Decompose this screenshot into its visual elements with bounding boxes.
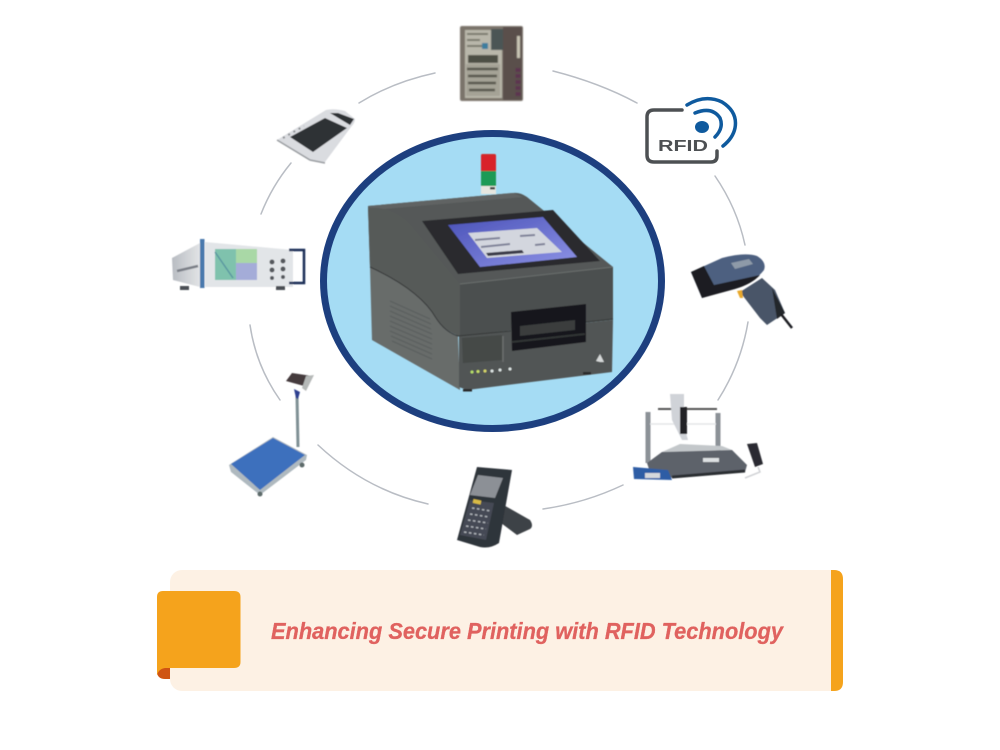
icon: dispensing robot bbox=[633, 394, 763, 480]
lower side bbox=[370, 267, 460, 390]
lower panel details bbox=[462, 335, 502, 363]
banner right accent bbox=[831, 570, 843, 691]
fold tab bbox=[157, 660, 170, 679]
touch screen bezel bbox=[422, 210, 600, 274]
banner title: Enhancing Secure Printing with RFID Technology bbox=[271, 618, 784, 644]
signal tower light bbox=[481, 154, 496, 194]
icon: platform scale bbox=[229, 373, 314, 496]
upper side and top bbox=[368, 193, 613, 336]
paper slot bbox=[511, 304, 586, 351]
icon: barcode scanner bbox=[691, 254, 792, 328]
status LEDs bbox=[470, 368, 512, 374]
touch screen bbox=[448, 217, 577, 267]
logo mark bbox=[596, 354, 604, 362]
vent grille bbox=[390, 301, 432, 359]
connecting ring arcs bbox=[250, 71, 748, 509]
central printer bbox=[368, 154, 613, 392]
orange square bbox=[157, 591, 240, 676]
icon: control cabinet bbox=[460, 26, 523, 101]
icon: RFID: RFID bbox=[658, 138, 708, 155]
lower front face bbox=[459, 320, 613, 390]
icon: spectrum analyzer bbox=[172, 239, 304, 290]
icon: handheld RFID reader bbox=[457, 467, 532, 548]
banner panel bbox=[170, 570, 842, 691]
icon: RFID bbox=[647, 99, 735, 162]
upper front face bbox=[460, 267, 613, 336]
printer body bbox=[368, 193, 613, 392]
icon: keypad tablet device bbox=[277, 109, 355, 163]
title banner bbox=[157, 570, 843, 691]
central blue circle bbox=[324, 134, 662, 428]
